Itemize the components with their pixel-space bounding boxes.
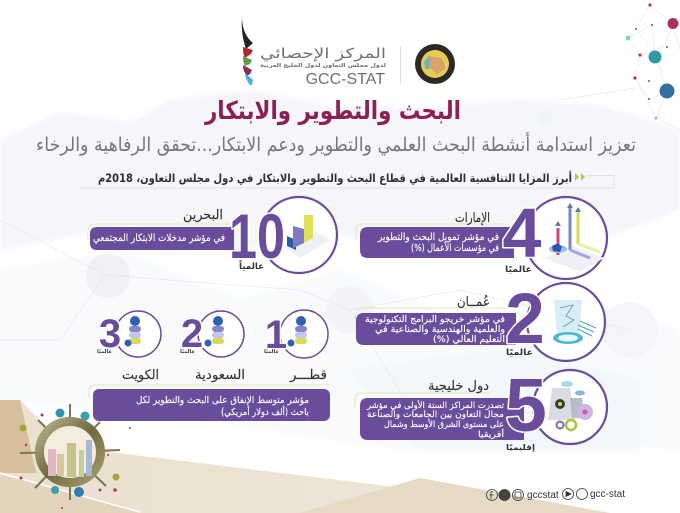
big number: 1 [265,313,287,357]
description [136,395,309,418]
rank label: عالميًا [506,348,533,358]
heading text: أبرز المزايا التنافسية العالمية في قطاع البحث والتطوير والابتكار في دول مجلس التعاون، 2018م [98,170,572,186]
country name: دول خليجية [428,379,489,394]
card: Saudi rank 2 [180,311,245,383]
description: أفريقيا [478,428,504,440]
rank label: عالمياً [238,259,264,272]
icon: rising arrows chart [544,203,604,272]
icon: bar chart [286,215,330,258]
GCC emblem [415,44,455,84]
description: في مؤسسات الأعمال (%) [411,241,499,254]
social media footer [486,488,625,501]
divider [400,46,402,84]
ship wheel with skyline [20,404,120,500]
country name: قطـــر [289,368,327,383]
handle gcc-stat: gcc-stat [590,489,625,500]
panel: R&D spending per researcher [89,385,330,421]
description: على مستوى الشرق الأوسط وشمال [384,419,504,430]
country name: البحرين [183,208,223,223]
icon: data cylinder [553,300,596,344]
social icons [486,488,588,500]
circle [115,311,161,357]
purple text bar [90,227,234,250]
big number: 2 [181,312,203,356]
circle [527,283,605,361]
big number: 2 [505,280,545,359]
description: تصدرت المراكز الستة الأولى في مؤشر [366,400,505,411]
description [377,232,499,254]
logo English name: GCC-STAT [306,71,385,88]
description: في مؤشر مدخلات الابتكار المجتمعي [93,233,225,244]
big number: 5 [505,363,547,447]
logo subtitle: لدول مجلس التعاون لدول الخليج العربية [260,63,386,69]
card: Gulf countries rank 5 [355,363,607,452]
handle gccstat: gccstat [527,490,559,501]
circle [261,197,337,273]
subtitle: تعزيز استدامة أنشطة البحث العلمي والتطوير ودعم الابتكار...تحقق الرفاهية والرخاء [36,132,636,156]
purple text bar [93,389,330,421]
title: البحث والتطوير والابتكار [203,96,461,126]
circle [198,311,244,357]
icon: stacked coins [288,316,307,346]
description: التعليم العالي (%) [433,335,505,345]
description: مجال التعاون بين الجامعات والصناعة [367,410,504,420]
country name: السعودية [195,368,245,383]
rank label: عالميًا [264,348,279,355]
country name: الكويت [122,368,159,383]
rank label: إقليميًا [506,443,535,452]
description [365,315,505,345]
description: والعلمية والهندسية والصناعية في [375,325,505,335]
description [366,400,505,440]
rank label: عالميًا [180,348,195,355]
country name: عُمــان [457,294,490,310]
rank label: عالميًا [505,265,532,275]
accent line [356,224,505,240]
card: Kuwait rank 3 [97,311,161,383]
bottom beige band [0,400,610,513]
circle [280,310,328,358]
icon: nuclear cooling towers and atom [548,381,593,430]
circle [525,197,607,279]
description: في مؤشر تمويل البحث والتطوير [377,232,499,243]
purple text bar [356,313,516,345]
logo Arabic name: المركز الإحصائي [260,46,386,62]
purple text bar [360,227,514,258]
description: في مؤشر خريجو البرامج التكنولوجية [365,315,505,325]
purple text bar [360,398,524,440]
description: باحث (ألف دولار أمريكي) [221,405,309,418]
card: Emirates rank 4 [356,194,607,279]
network nodes top right [560,3,680,130]
big number: 4 [503,194,542,272]
logo: GCC-STAT [242,17,386,88]
card: Oman rank 2 [356,280,605,361]
country name: الإمارات [455,211,490,226]
circle [533,370,607,444]
rank label: عالميًا [97,348,112,355]
heading chevrons [575,173,585,181]
card: Qatar rank 1 [264,310,328,383]
section heading [81,170,614,188]
big number: 3 [99,312,121,356]
description: مؤشر متوسط الإنفاق على البحث والتطوير لكل [136,395,309,406]
logo ribbon [242,17,253,85]
icon: stacked coins [124,316,141,346]
card: Bahrain rank 10 [88,197,337,273]
big number: 10 [229,202,285,272]
icon: stacked coins [204,316,224,346]
